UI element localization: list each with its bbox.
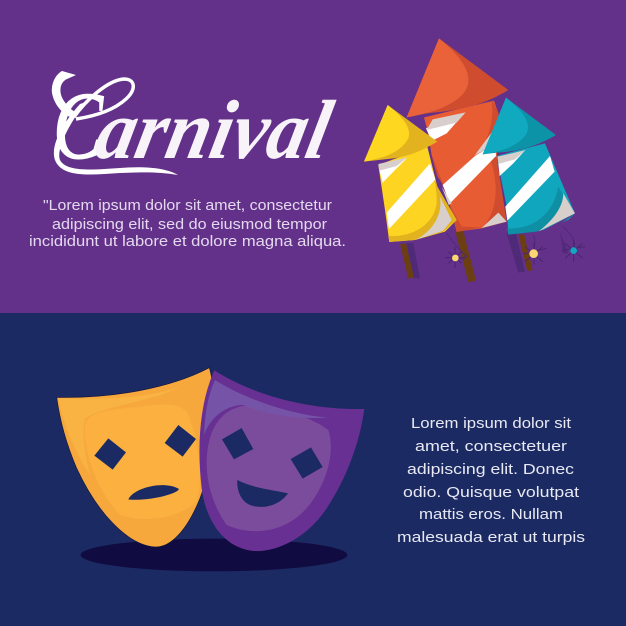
tragedy mask — [57, 368, 214, 547]
text block: top paragraph: incididunt ut labore et dolore magna aliqua. — [29, 234, 346, 250]
text block: bottom paragraph: odio. Quisque volutpat — [403, 484, 580, 501]
ground shadow — [81, 539, 347, 571]
teal rocket — [483, 98, 575, 235]
title: Carnival script lettering: C — [53, 72, 104, 179]
text block: bottom paragraph: malesuada erat ut turpis — [397, 529, 585, 546]
text block: bottom paragraph: Lorem ipsum dolor sit — [411, 415, 572, 432]
icon: comedy and tragedy masks — [57, 368, 364, 571]
text block: bottom paragraph: adipiscing elit. Donec — [407, 461, 575, 478]
text block: top paragraph — [29, 198, 346, 250]
text block: top paragraph: "Lorem ipsum dolor sit amet, consectetur — [43, 198, 332, 214]
panel: bottom navy band — [0, 313, 626, 626]
panel: top purple band — [0, 0, 626, 313]
title: Carnival script lettering: arnival — [88, 84, 341, 177]
text block: top paragraph: adipiscing elit, sed do eiusmod tempor — [52, 217, 327, 233]
comedy mask — [199, 370, 364, 551]
yellow rocket — [364, 105, 457, 242]
red rocket — [407, 38, 508, 232]
rocket shadows and sticks — [400, 227, 575, 282]
text block: bottom paragraph — [397, 415, 585, 546]
text block: bottom paragraph: amet, consectetuer — [415, 438, 567, 455]
sparks — [445, 240, 585, 268]
icon: fireworks rockets — [364, 38, 585, 282]
text block: bottom paragraph: mattis eros. Nullam — [419, 506, 563, 523]
